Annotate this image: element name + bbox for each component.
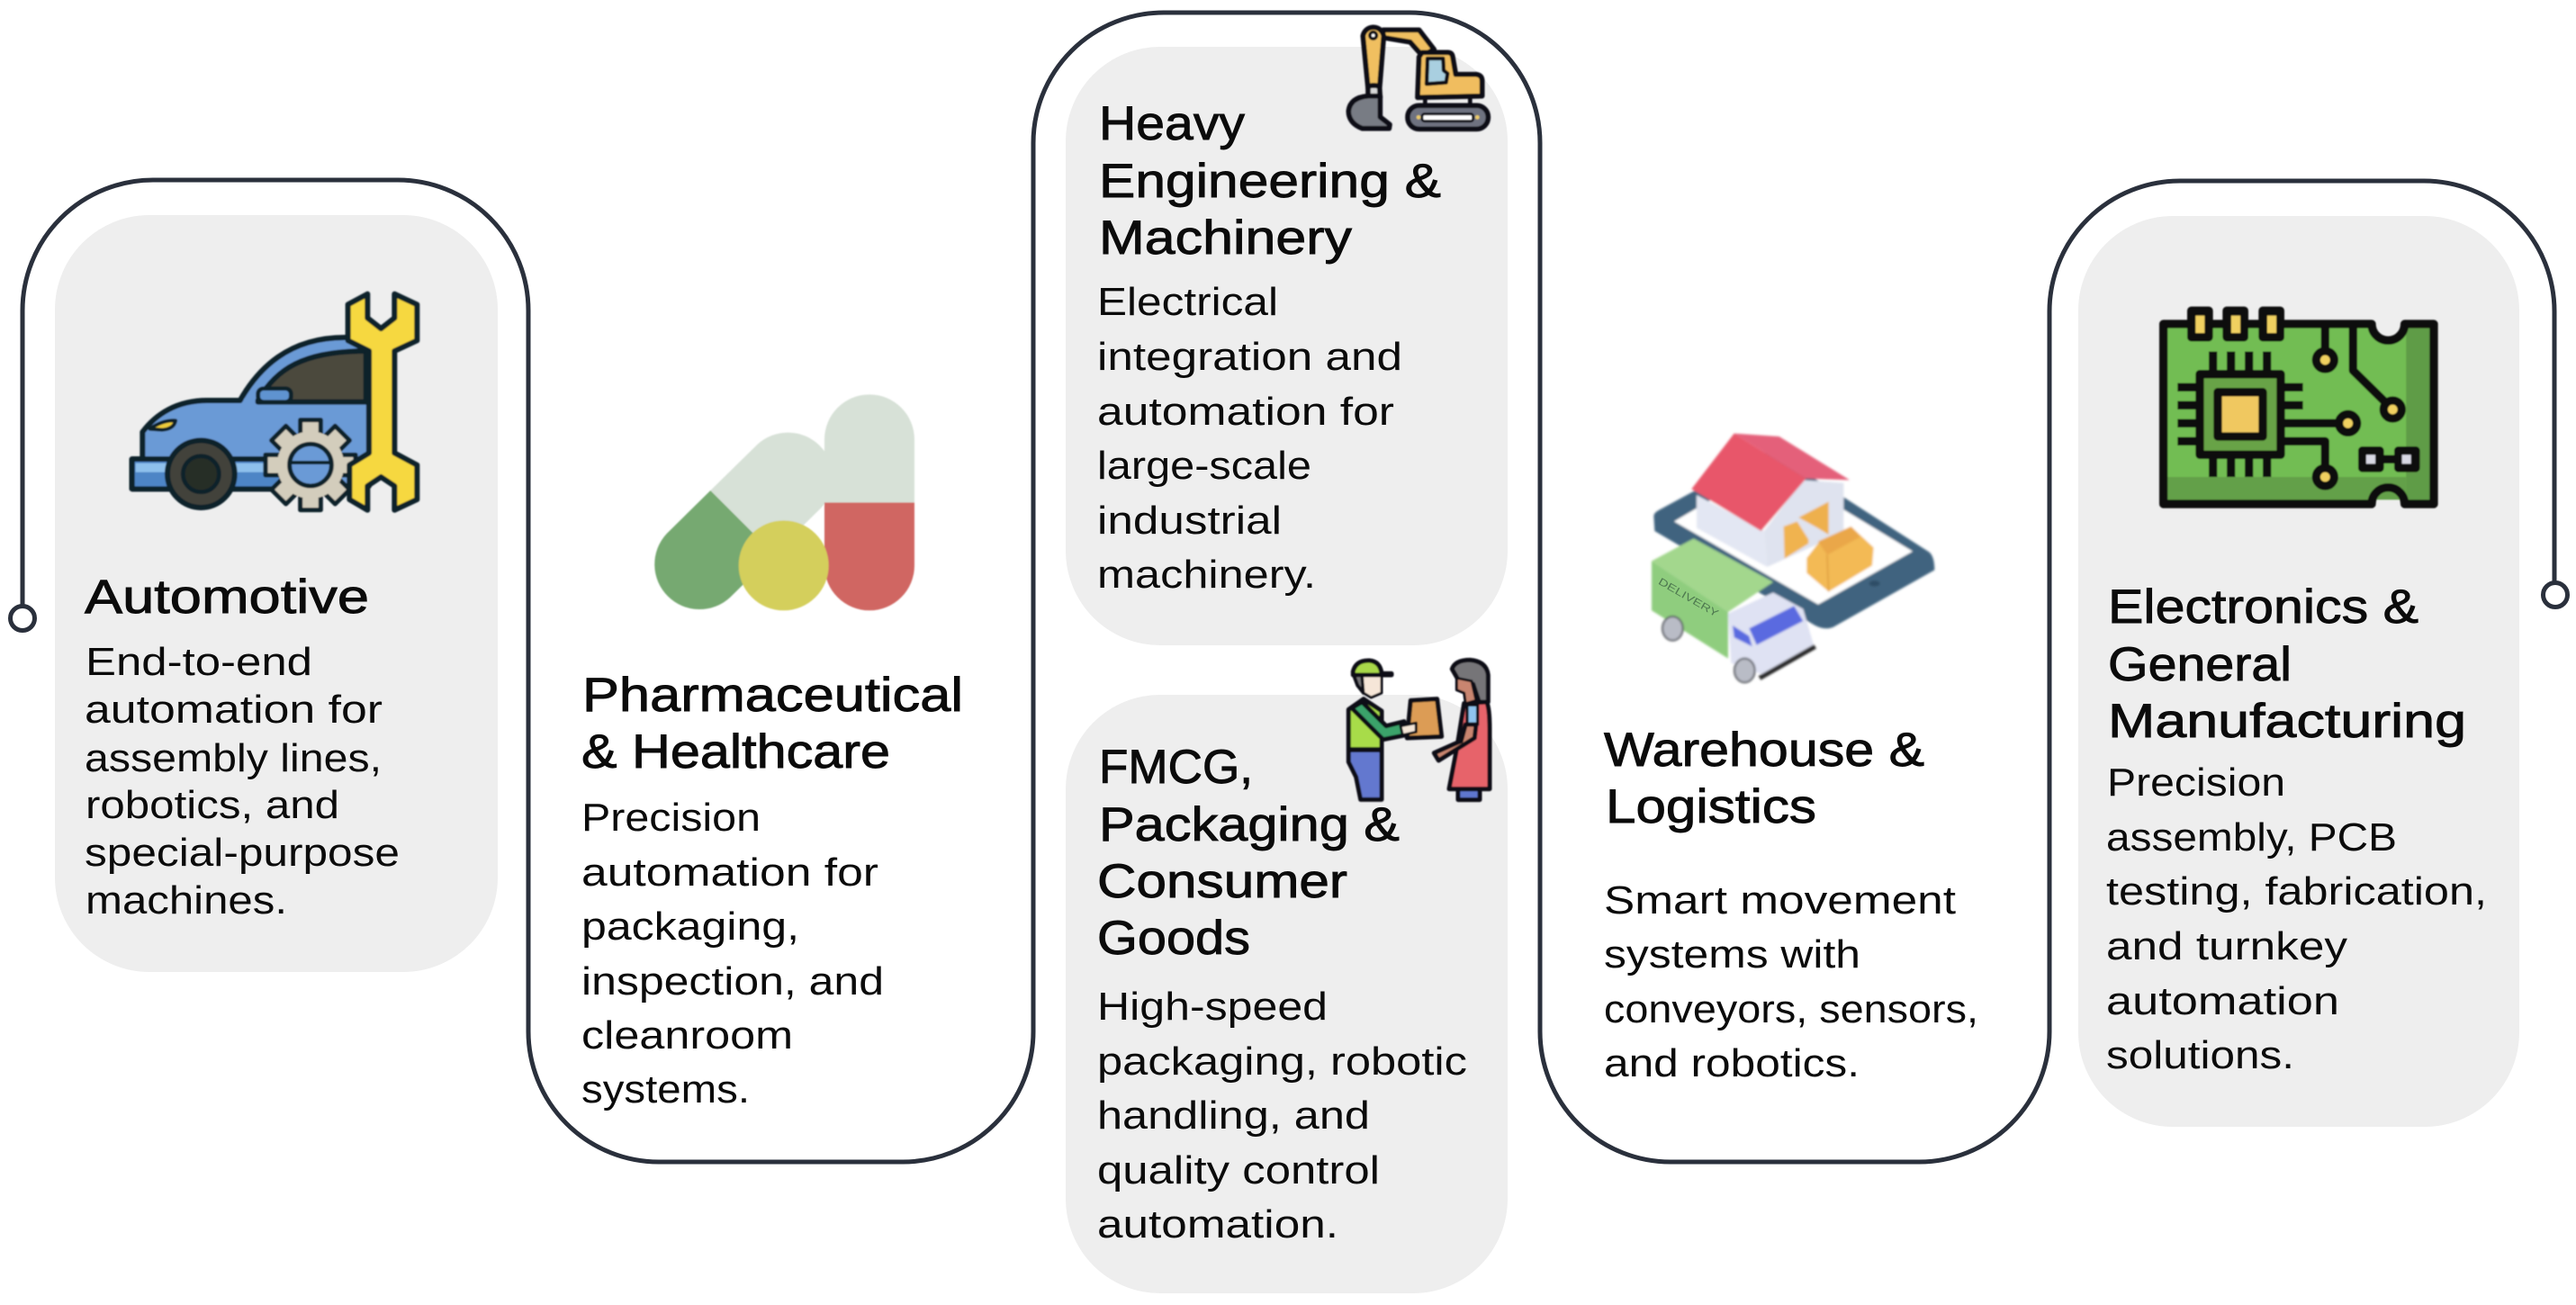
text: automotive description: assembly lines, (85, 736, 382, 780)
text: automotive description: machines. (86, 878, 287, 922)
icon: warehouse, tablet and delivery truck (1652, 434, 1934, 682)
text: heavy engineering description: automation for (1097, 390, 1394, 434)
text: warehouse description (1604, 878, 1978, 1085)
panel: electronics and general manufacturing (2078, 216, 2519, 1127)
text: warehouse description: systems with (1604, 932, 1860, 976)
text: FMCG description: packaging, robotic (1097, 1040, 1467, 1084)
heading: Electronics and General Manufacturing: General (2108, 638, 2292, 691)
icon: capsules and pill (654, 394, 914, 610)
text: electronics description: Precision (2107, 760, 2285, 805)
panel: heavy engineering and machinery (1066, 27, 1508, 645)
heading: Warehouse and Logistics (1604, 724, 1924, 833)
text: heavy engineering description: Electrical (1097, 280, 1278, 324)
label on truck: DELIVERY (1656, 577, 1721, 620)
panel: automotive (55, 215, 498, 972)
heading: Warehouse and Logistics: Warehouse & (1604, 724, 1924, 777)
text: pharmaceutical description: packaging, (581, 904, 799, 949)
heading: Pharmaceutical and Healthcare: Pharmaceutical (582, 669, 963, 722)
panel: warehouse and logistics (1604, 434, 1978, 1085)
text: FMCG description: quality control (1097, 1148, 1380, 1192)
text: FMCG description: handling, and (1097, 1094, 1370, 1138)
text: automotive description (85, 640, 400, 922)
heading: Warehouse and Logistics: Logistics (1606, 780, 1816, 833)
icon: car and wrench (132, 294, 417, 510)
heading: FMCG, Packaging and Consumer Goods: FMCG, (1099, 741, 1253, 794)
text: FMCG description: automation. (1097, 1202, 1338, 1246)
text: electronics description (2106, 760, 2487, 1077)
text: heavy engineering description: machinery. (1097, 553, 1316, 597)
heading: Pharmaceutical and Healthcare (581, 669, 963, 778)
text: pharmaceutical description (581, 796, 884, 1112)
text: pharmaceutical description: Precision (581, 796, 761, 840)
icon: delivery handover (1348, 660, 1490, 800)
heading: Heavy Engineering and Machinery: Machinery (1099, 212, 1353, 265)
icon: circuit board (2164, 307, 2434, 504)
text: electronics description: assembly, PCB (2106, 815, 2397, 860)
text: pharmaceutical description: cleanroom (581, 1013, 793, 1058)
heading: FMCG, Packaging and Consumer Goods: Consumer (1097, 855, 1347, 908)
heading: Electronics and General Manufacturing (2108, 580, 2466, 748)
text: electronics description: and turnkey (2106, 924, 2347, 968)
panel: FMCG, packaging and consumer goods (1066, 660, 1508, 1293)
text: heavy engineering description: integration and (1097, 335, 1402, 379)
heading: Electronics and General Manufacturing: Electronics & (2108, 580, 2418, 634)
heading: Automotive: Automotive (85, 571, 369, 624)
text: warehouse description: and robotics. (1604, 1041, 1860, 1085)
text: warehouse description: Smart movement (1604, 878, 1956, 922)
text: heavy engineering description: large-scale (1097, 444, 1311, 488)
heading: FMCG, Packaging and Consumer Goods: Goods (1097, 912, 1250, 965)
text: pharmaceutical description: automation for (581, 850, 878, 895)
text: electronics description: solutions. (2106, 1033, 2294, 1077)
text: automotive description: robotics, and (86, 783, 339, 827)
text: warehouse description: conveyors, sensors, (1604, 987, 1978, 1031)
text: electronics description: testing, fabrication, (2106, 869, 2487, 914)
text: pharmaceutical description: systems. (581, 1067, 750, 1112)
heading: Heavy Engineering and Machinery: Engineering & (1099, 155, 1441, 208)
heading: FMCG, Packaging and Consumer Goods (1097, 741, 1400, 965)
text: FMCG description (1097, 985, 1467, 1246)
text: automotive description: automation for (85, 688, 383, 732)
heading: Pharmaceutical and Healthcare: & Healthcare (581, 725, 890, 778)
heading: Heavy Engineering and Machinery: Heavy (1099, 97, 1246, 150)
text: heavy engineering description (1097, 280, 1402, 597)
text: automotive description: End-to-end (86, 640, 312, 684)
text: electronics description: automation (2106, 979, 2339, 1023)
text: heavy engineering description: industrial (1097, 499, 1282, 543)
heading: FMCG, Packaging and Consumer Goods: Packaging & (1099, 798, 1400, 851)
heading: Heavy Engineering and Machinery (1099, 97, 1441, 265)
text: FMCG description: High-speed (1097, 985, 1328, 1029)
text: pharmaceutical description: inspection, and (581, 959, 884, 1004)
panel: pharmaceutical and healthcare (581, 394, 963, 1112)
icon: excavator (1348, 27, 1488, 129)
heading: Electronics and General Manufacturing: Manufacturing (2108, 695, 2466, 748)
text: automotive description: special-purpose (85, 831, 400, 875)
